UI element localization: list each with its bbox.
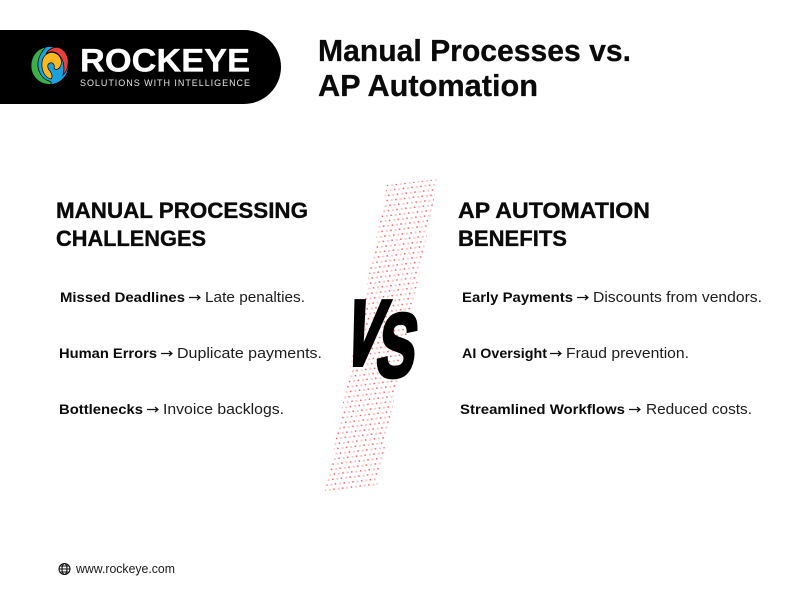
item: streamlined workflows: Streamlined Workflows bbox=[460, 401, 625, 417]
title: Manual Processes vs. bbox=[318, 33, 631, 68]
title: AP Automation bbox=[318, 68, 538, 103]
item: ai oversight: Fraud prevention. bbox=[566, 346, 689, 362]
item: ai oversight bbox=[462, 345, 689, 362]
item: streamlined workflows: Reduced costs. bbox=[646, 402, 752, 418]
heading: benefits bbox=[458, 198, 650, 251]
heading: challenges bbox=[56, 198, 308, 251]
website url: www.rockeye.com bbox=[75, 561, 175, 576]
panel: ap automation benefits bbox=[458, 198, 762, 418]
VS emblem bbox=[337, 282, 424, 397]
tagline: SOLUTIONS WITH INTELLIGENCE bbox=[80, 78, 250, 88]
icon: globe bbox=[59, 564, 70, 574]
item: ai oversight: AI Oversight bbox=[462, 345, 547, 361]
item: missed deadlines: Late penalties. bbox=[205, 290, 305, 306]
item: bottlenecks: Bottlenecks bbox=[59, 401, 143, 417]
heading: challenges: CHALLENGES bbox=[56, 226, 206, 251]
halftone diagonal band bbox=[325, 179, 438, 492]
heading: benefits: AP AUTOMATION bbox=[458, 198, 650, 223]
title bbox=[318, 33, 631, 103]
item: human errors bbox=[59, 345, 322, 362]
heading: challenges: MANUAL PROCESSING bbox=[56, 198, 308, 223]
item: early payments bbox=[462, 289, 762, 306]
VS emblem: S bbox=[371, 296, 424, 397]
item: early payments: Discounts from vendors. bbox=[593, 290, 762, 306]
item: missed deadlines bbox=[60, 289, 305, 306]
panel: manual processing challenges bbox=[56, 198, 322, 418]
item: bottlenecks bbox=[59, 401, 284, 418]
footer website bbox=[59, 561, 175, 576]
item: early payments: Early Payments bbox=[462, 289, 573, 305]
icon: swirl logo bbox=[30, 46, 68, 84]
logo banner bbox=[0, 30, 281, 104]
VS emblem: V bbox=[337, 282, 395, 383]
item: human errors: Duplicate payments. bbox=[177, 346, 322, 362]
item: missed deadlines: Missed Deadlines bbox=[60, 289, 185, 305]
item: human errors: Human Errors bbox=[59, 345, 157, 361]
item: bottlenecks: Invoice backlogs. bbox=[163, 402, 284, 418]
item: streamlined workflows bbox=[460, 401, 752, 418]
brand name: ROCKEYE bbox=[80, 42, 250, 78]
heading: benefits: BENEFITS bbox=[458, 226, 567, 251]
